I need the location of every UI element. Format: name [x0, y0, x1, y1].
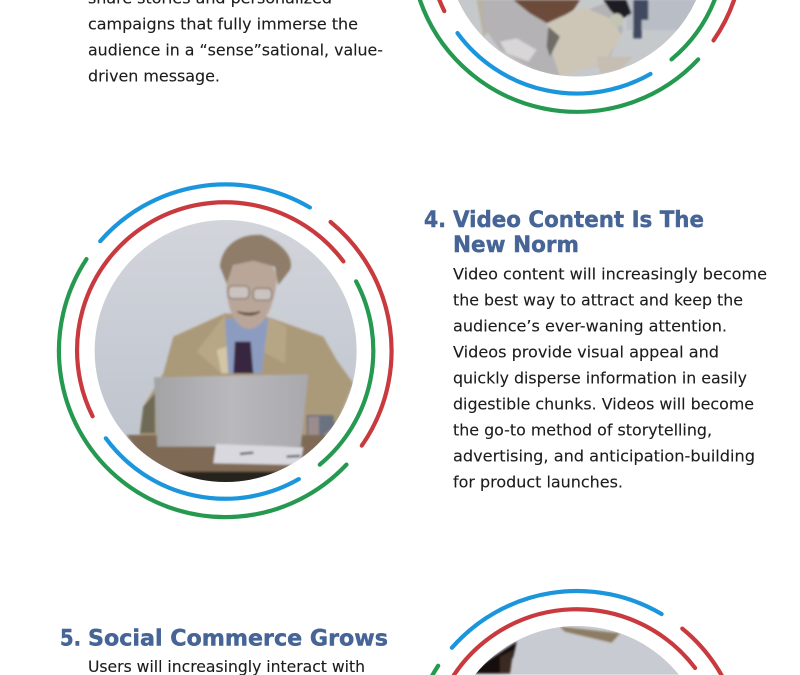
- text block: section 3 closing paragraph: driven message.: [88, 66, 220, 86]
- heading: 4. Video Content Is The New Norm: New Norm: [453, 233, 579, 258]
- text block: video content paragraph: for product launches.: [453, 473, 623, 492]
- rings: social commerce photo: [432, 591, 722, 675]
- text block: video content paragraph: digestible chunks. Videos will become: [453, 395, 754, 414]
- text block: video content paragraph: audience’s ever-waning attention.: [453, 317, 727, 336]
- text block: video content paragraph: quickly disperse information in easily: [453, 369, 747, 388]
- heading: 5. Social Commerce Grows: Social Commerce Grows: [88, 626, 388, 652]
- photo: man at laptop: [93, 220, 358, 487]
- photo circle: woman with coat: [420, 0, 734, 112]
- heading: 4. Video Content Is The New Norm: 4.: [424, 208, 446, 233]
- photo circle: social commerce: [432, 591, 722, 675]
- photo: person by wall: [468, 626, 688, 675]
- photo circle: man at laptop: [59, 184, 392, 517]
- text block: video content paragraph: the best way to attract and keep the: [453, 291, 743, 310]
- text block: video content paragraph: Video content will increasingly become: [453, 265, 767, 284]
- heading: 5. Social Commerce Grows: 5.: [60, 626, 81, 652]
- heading: 4. Video Content Is The New Norm: Video Content Is The: [453, 208, 704, 233]
- text block: section 3 closing paragraph: campaigns that fully immerse the: [88, 14, 358, 34]
- photo: woman: [458, 0, 696, 76]
- heading: 4. Video Content Is The New Norm: [424, 208, 704, 258]
- text block: video content paragraph: [453, 265, 767, 492]
- text block: video content paragraph: Videos provide visual appeal and: [453, 343, 719, 362]
- text block: video content paragraph: the go-to method of storytelling,: [453, 421, 712, 440]
- rings: woman photo: [420, 0, 734, 112]
- text block: video content paragraph: advertising, and anticipation-building: [453, 447, 755, 466]
- text block: section 3 closing paragraph: audience in a “sense”sational, value-: [88, 40, 383, 60]
- rings: man photo: [59, 184, 392, 517]
- text block: section 3 closing paragraph: [88, 0, 383, 86]
